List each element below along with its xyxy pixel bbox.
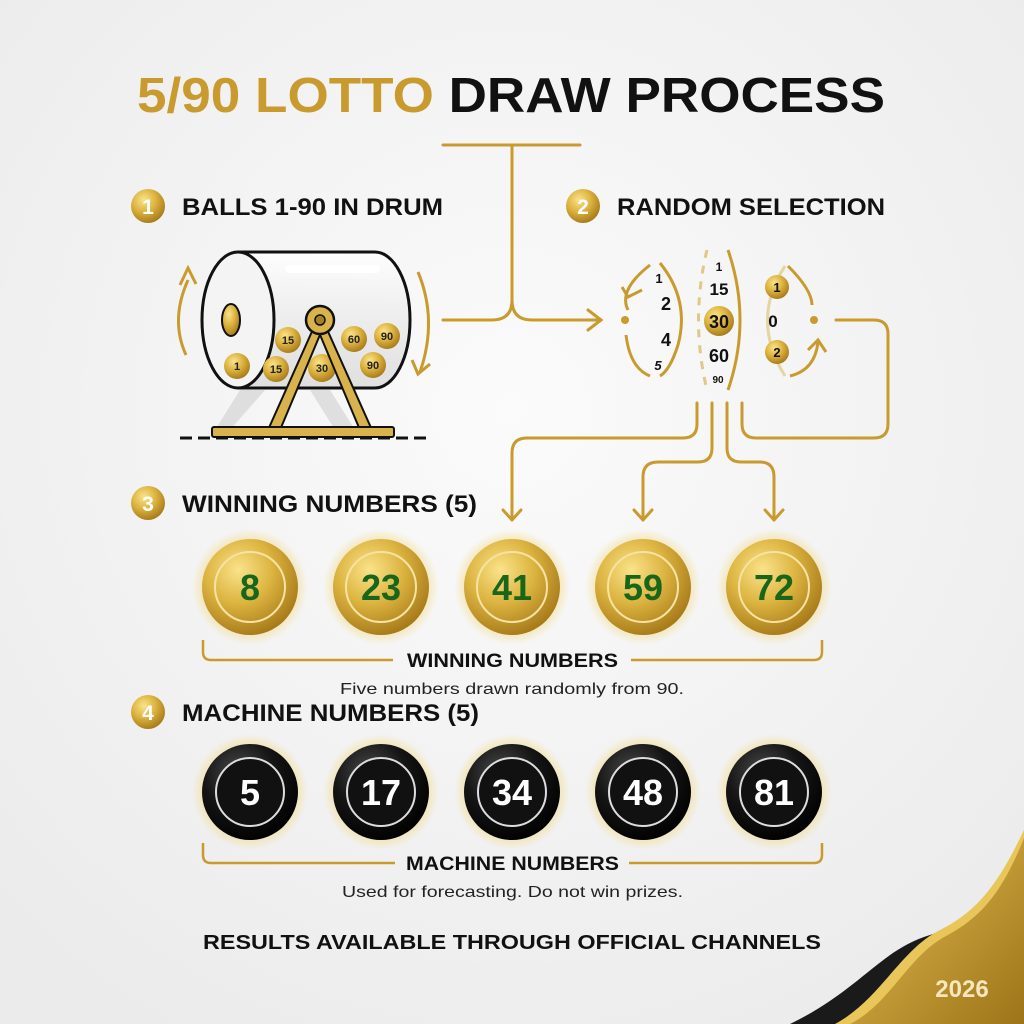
machine numbers bracket and caption: MACHINE NUMBERS [406,854,619,875]
footer: RESULTS AVAILABLE THROUGH OFFICIAL CHANNELS [203,932,821,954]
machine balls: 34 [492,772,532,813]
random selection diagram: 1 [773,280,781,295]
drum illustration: 1 [234,361,240,373]
step 1 heading: BALLS 1-90 IN DRUM [182,194,443,221]
machine balls [192,734,832,850]
random selection diagram: 15 [710,280,728,299]
drum illustration: 30 [316,363,328,375]
random selection diagram: 2 [661,294,671,314]
machine balls: 5 [240,772,260,813]
random selection diagram: 60 [709,346,729,366]
random selection diagram: 30 [709,312,729,332]
year label: 2026 [935,976,989,1003]
title: 5/90 LOTTO DRAW PROCESS [137,69,885,123]
drum illustration [178,252,430,438]
step 2 heading: 2 [577,196,589,219]
drum illustration: 60 [348,334,360,346]
machine balls: 81 [754,772,794,813]
drum illustration: 90 [381,331,393,343]
corner decoration [790,830,1024,1024]
step 2 heading: RANDOM SELECTION [617,194,885,221]
drum illustration: 90 [367,360,379,372]
flow arrows to winning balls [503,320,888,520]
winning balls: 8 [240,567,260,608]
random selection diagram: 4 [661,330,671,350]
step 3 heading: 3 [142,493,154,516]
machine balls: 17 [361,772,401,813]
winning numbers bracket and caption [203,640,822,698]
machine numbers bracket and caption [203,843,822,901]
machine numbers bracket and caption: Used for forecasting. Do not win prizes. [342,884,683,901]
machine balls: 48 [623,772,663,813]
winning numbers bracket and caption: WINNING NUMBERS [407,651,618,672]
winning balls: 72 [754,567,794,608]
random selection diagram [621,250,826,390]
step 4 heading [131,695,479,729]
connector from title [443,145,601,330]
winning balls: 59 [623,567,663,608]
drum illustration: 15 [270,364,282,376]
random selection diagram: 1 [655,271,663,286]
random selection diagram: 1 [716,260,723,274]
step 3 heading: WINNING NUMBERS (5) [182,491,477,518]
drum illustration: 15 [282,335,294,347]
random selection diagram: 90 [712,375,724,386]
winning balls: 23 [361,567,401,608]
random selection diagram: 0 [768,312,778,331]
winning balls: 41 [492,567,532,608]
random selection diagram: 5 [654,358,662,373]
step 1 heading: 1 [142,196,154,219]
winning balls [192,529,832,645]
step 4 heading: 4 [142,702,154,725]
step 2 heading [566,189,885,223]
winning numbers bracket and caption: Five numbers drawn randomly from 90. [340,681,684,698]
step 1 heading [131,189,443,223]
step 3 heading [131,486,477,520]
step 4 heading: MACHINE NUMBERS (5) [182,700,479,727]
random selection diagram: 2 [773,345,781,360]
